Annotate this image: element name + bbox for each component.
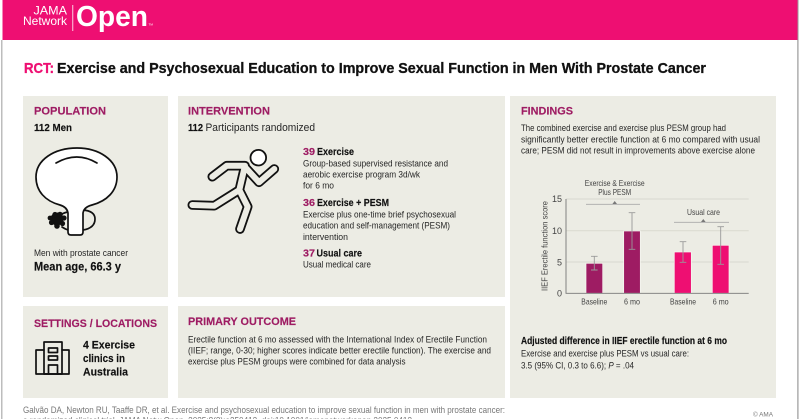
- bar: usual care 6 mo: [712, 245, 729, 293]
- header banner: [2, 0, 798, 40]
- sample size: 112 Men: [34, 122, 72, 134]
- error bars: [591, 213, 724, 270]
- heading: settings / locations: SETTINGS / LOCATIONS: [34, 318, 157, 330]
- text: findings summary: [521, 123, 760, 157]
- text: 4 exercise clinics in Australia: Australia: [83, 366, 129, 378]
- text: 4 exercise clinics in Australia: 4 Exercise: [83, 340, 135, 352]
- arm: exercise: Exercise: [317, 147, 354, 158]
- text: adjusted difference: 3.5 (95% CI, 0.3 to 6.6); P = .04: [521, 360, 635, 372]
- logo: JAMA Network Open: Network: [23, 14, 68, 28]
- arm: exercise + PESM: 36: [303, 197, 315, 209]
- bar: exercise 6 mo: [624, 231, 640, 293]
- text: findings summary: The combined exercise and exercise plus PESM group had: [521, 123, 726, 134]
- icon: building: [36, 342, 69, 374]
- arm: exercise + PESM: [303, 197, 456, 243]
- text: participants randomized: 112: [188, 122, 203, 134]
- icon: runner: [192, 150, 274, 229]
- x axis labels: 6 mo: [624, 296, 640, 306]
- group label: exercise and exercise plus PESM: Plus PESM: [598, 187, 631, 197]
- logo: JAMA Network Open: [23, 1, 153, 33]
- y axis ticks: 10: [552, 226, 562, 236]
- arm: exercise: for 6 mo: [303, 180, 334, 192]
- arm: usual care: Usual medical care: [303, 260, 371, 271]
- y axis ticks: 5: [557, 258, 562, 268]
- text: adjusted difference: Exercise and exercise plus PESM vs usual care:: [521, 349, 689, 360]
- heading: primary outcome: PRIMARY OUTCOME: [188, 316, 297, 328]
- text: outcome description: Erectile function at 6 mo assessed with the International Index of Erectile Function: [188, 334, 487, 345]
- panel: population: [23, 96, 168, 297]
- citation: [23, 405, 505, 419]
- logo: JAMA Network Open: JAMA: [34, 6, 67, 18]
- arm: usual care: Usual care: [316, 249, 362, 260]
- panel: intervention: [178, 96, 505, 297]
- citation: Galvão DA, Newton RU, Taaffe DR, et al. Exercise and psychosexual education to improve sexual function in men with prostate cancer:: [23, 405, 505, 416]
- copyright: © AMA: [753, 410, 774, 418]
- x axis labels: [581, 296, 729, 306]
- text: findings summary: significantly better erectile function at 6 mo compared with usual: [521, 134, 760, 145]
- title: Exercise and Psychosexual Education to Improve Sexual Function in Men With Prostate Cancer: [57, 61, 706, 77]
- arm: exercise + PESM: intervention: [303, 232, 348, 243]
- text: participants randomized: Participants randomized: [206, 122, 315, 134]
- y axis ticks: 15: [552, 194, 562, 204]
- panel: findings: [510, 96, 776, 398]
- heading: intervention: INTERVENTION: [188, 106, 270, 118]
- panel: primary outcome: [178, 306, 505, 398]
- group label: usual care: Usual care: [687, 207, 720, 217]
- text: adjusted difference: Adjusted difference in IIEF erectile function at 6 mo: [521, 336, 727, 347]
- y axis ticks: 0: [557, 288, 562, 298]
- arm: exercise: Group-based supervised resistance and: [303, 159, 448, 170]
- panel: settings / locations: [23, 306, 168, 398]
- y axis ticks: [552, 194, 562, 298]
- arm: exercise + PESM: Exercise + PESM: [317, 198, 389, 209]
- text: 4 exercise clinics in Australia: [83, 340, 135, 378]
- title: RCT:: [24, 61, 54, 77]
- arm: exercise + PESM: Exercise plus one-time brief psychosexual: [303, 210, 456, 220]
- icon: bladder and prostate with tumor: [36, 148, 117, 235]
- text: mean age: Mean age, 66.3 y: [34, 262, 122, 274]
- text: 4 exercise clinics in Australia: clinics in: [83, 353, 125, 365]
- text: outcome description: (IIEF; range, 0-30; higher scores indicate better erectile function). The exercise and: [188, 345, 491, 356]
- text: adjusted difference: [521, 336, 727, 372]
- arm: exercise: 39: [303, 146, 315, 158]
- text: outcome description: exercise plus PESM groups were combined for data analysis: [188, 356, 406, 368]
- y axis title: IIEF Erectile function score: [540, 201, 550, 291]
- logo: JAMA Network Open: TM: [148, 22, 153, 26]
- text: outcome description: [188, 334, 491, 368]
- group label: exercise and exercise plus PESM: Exercise & Exercise: [585, 178, 645, 188]
- text: findings summary: care; PESM did not result in improvements above exercise alone: [521, 146, 755, 157]
- arm: exercise: aerobic exercise program 3d/wk: [303, 170, 420, 181]
- logo: JAMA Network Open: Open: [76, 1, 148, 33]
- arm: usual care: 37: [303, 248, 315, 260]
- arm: exercise: [303, 146, 448, 192]
- text: men with prostate cancer: Men with prostate cancer: [34, 248, 128, 258]
- x axis labels: Baseline: [581, 296, 608, 306]
- heading: findings: FINDINGS: [521, 106, 574, 118]
- bar: usual care baseline: [674, 252, 691, 293]
- arm: usual care: [303, 248, 371, 271]
- heading: population: POPULATION: [34, 106, 106, 118]
- group label: usual care: [674, 207, 729, 222]
- x axis labels: 6 mo: [713, 296, 729, 306]
- arm: exercise + PESM: education and self-management (PESM): [303, 220, 450, 232]
- bar chart: IIEF erectile function score: [540, 178, 749, 306]
- x axis labels: Baseline: [670, 296, 696, 306]
- bar: exercise baseline: [586, 263, 603, 293]
- group label: exercise and exercise plus PESM: [585, 178, 645, 204]
